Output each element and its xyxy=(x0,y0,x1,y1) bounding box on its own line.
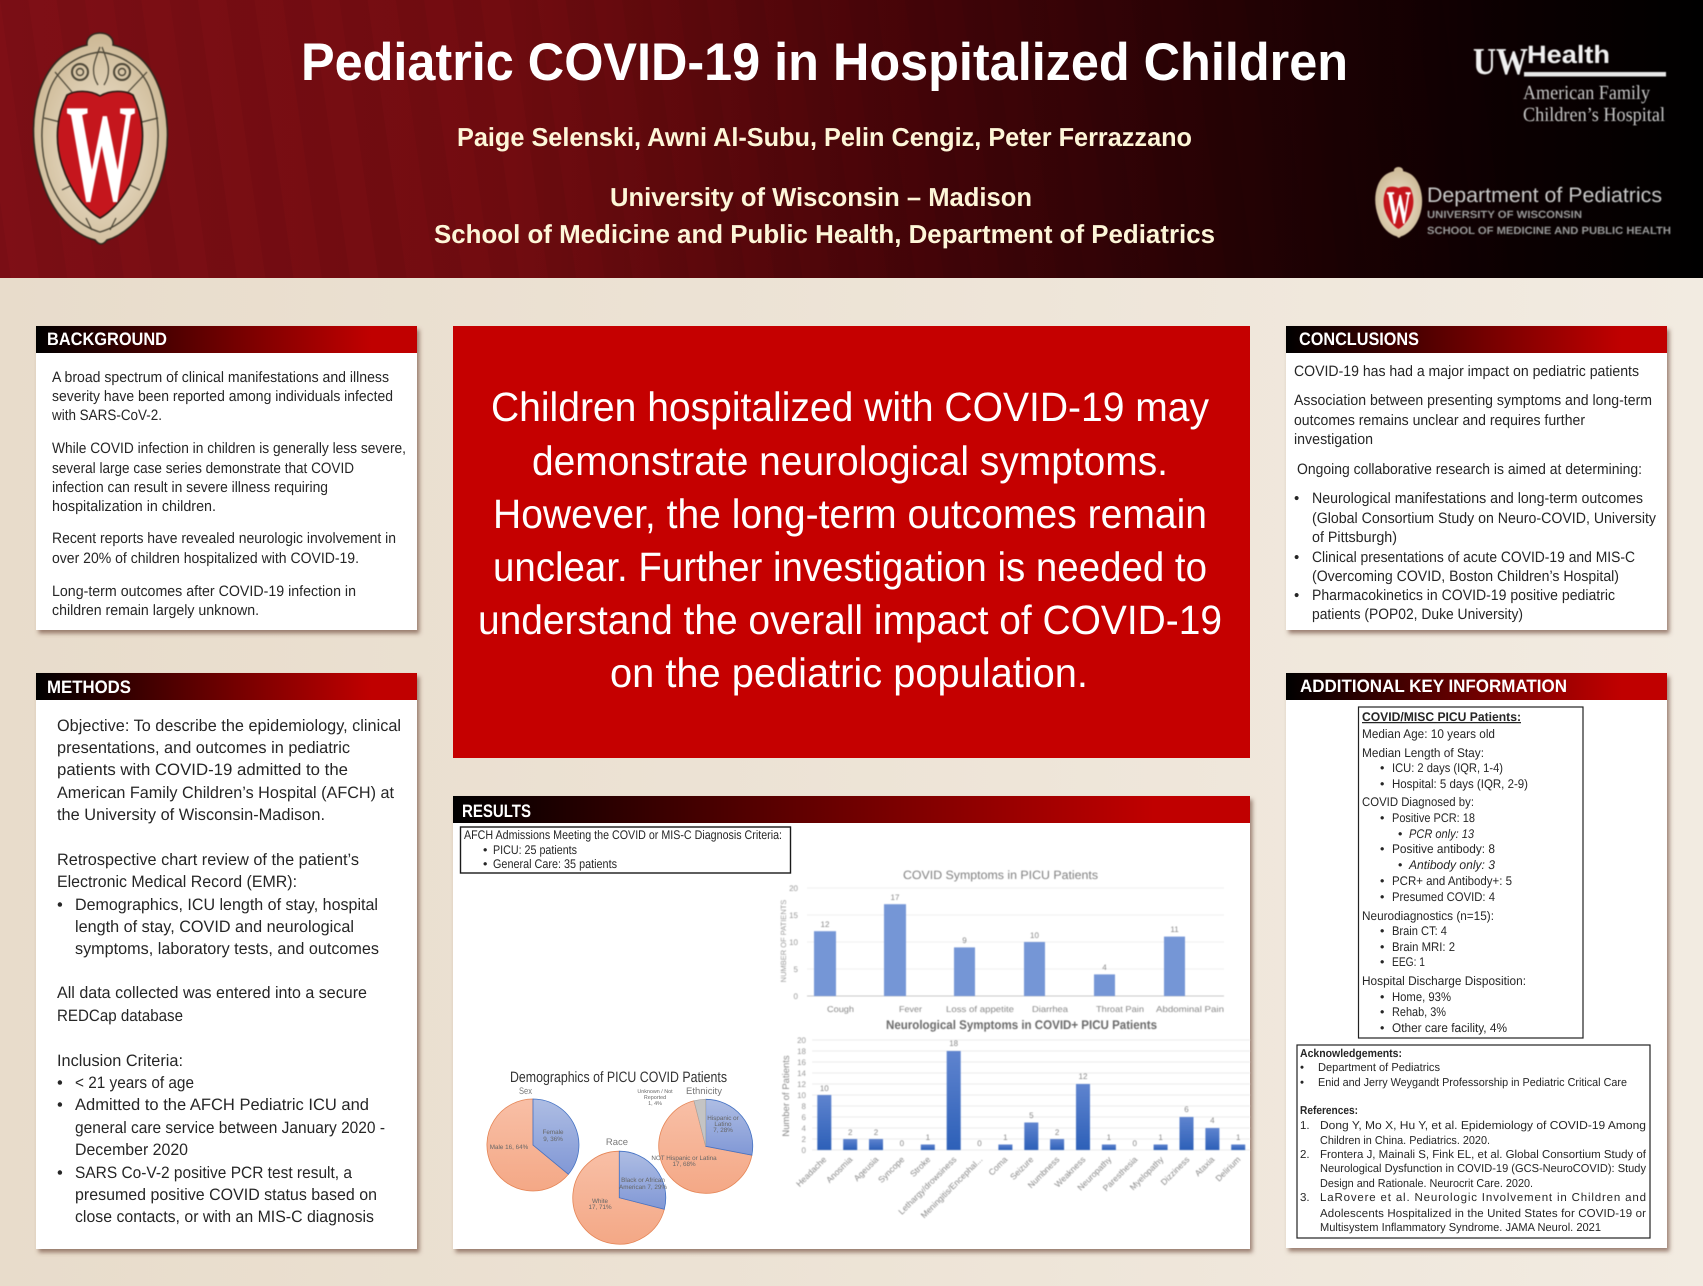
text block: inclusion criteria xyxy=(57,1052,385,1226)
bar chart: neurological symptoms: Headache xyxy=(794,1154,829,1189)
callout: acknowledgements and references: Frontera J, Mainali S, Fink EL, et al. Global Consortium Study of xyxy=(1320,1149,1647,1161)
pie chart: race: Race xyxy=(606,1137,628,1148)
callout: acknowledgements and references: Children in China. Pediatrics. 2020. xyxy=(1320,1135,1490,1147)
bar chart: neurological symptoms: Dizziness xyxy=(1159,1154,1191,1187)
pie chart: ethnicity: Unknown / Not xyxy=(637,1089,673,1095)
callout: patient statistics: Brain MRI: 2 xyxy=(1392,940,1455,954)
bar chart: COVID symptoms: 11 xyxy=(1170,925,1179,934)
bar chart: COVID symptoms: 20 xyxy=(789,884,799,893)
panel: key message: demonstrate neurological symptoms. xyxy=(532,438,1168,484)
callout: patient statistics: EEG: 1 xyxy=(1392,955,1425,969)
bar chart: neurological symptoms: Meningitis/Encephal... xyxy=(919,1154,984,1220)
bar chart: neurological symptoms: 1 xyxy=(1107,1133,1112,1142)
text block: inclusion criteria: December 2020 xyxy=(75,1141,188,1159)
pie chart: sex: Male 16, 64% xyxy=(490,1144,529,1151)
bar chart: COVID symptoms: Diarrhea xyxy=(1032,1004,1068,1014)
pie chart: ethnicity: Latino xyxy=(714,1121,732,1128)
bar chart: neurological symptoms: 6 xyxy=(1184,1105,1189,1114)
bar chart: COVID symptoms xyxy=(779,868,1224,1014)
text block: inclusion criteria: Admitted to the AFCH Pediatric ICU and xyxy=(75,1096,369,1114)
callout: patient statistics: • xyxy=(1398,858,1402,872)
bar chart: neurological symptoms: 1 xyxy=(1158,1133,1163,1142)
text block: objective: presentations, and outcomes in pediatric xyxy=(57,739,350,757)
callout: patient statistics: • xyxy=(1380,940,1384,954)
pie chart: ethnicity xyxy=(637,1086,753,1193)
bar chart: COVID symptoms: Throat Pain xyxy=(1096,1004,1144,1014)
callout: acknowledgements and references: Enid and Jerry Weygandt Professorship in Pediatric Critical Care xyxy=(1318,1077,1627,1089)
callout: patient statistics: PCR+ and Antibody+: 5 xyxy=(1392,874,1512,888)
bar chart: neurological symptoms: 14 xyxy=(797,1069,807,1078)
panel: methods xyxy=(36,673,417,1249)
text block: inclusion criteria: < 21 years of age xyxy=(75,1074,194,1092)
callout: patient statistics: • xyxy=(1380,811,1384,825)
bar chart: neurological symptoms: Ageusia xyxy=(852,1154,881,1183)
bar chart: COVID symptoms: Fever xyxy=(899,1004,922,1014)
bar chart: neurological symptoms: 4 xyxy=(802,1124,807,1133)
callout: patient statistics: • xyxy=(1380,955,1384,969)
callout: acknowledgements and references: Dong Y, Mo X, Hu Y, et al. Epidemiology of COVID-19 Among xyxy=(1320,1120,1646,1132)
text block: objective: American Family Children’s Hospital (AFCH) at xyxy=(57,784,394,802)
text block: objective: Objective: To describe the epidemiology, clinical xyxy=(57,717,401,735)
bar chart: COVID symptoms: 10 xyxy=(1030,931,1039,940)
callout: patient statistics: Neurodiagnostics (n=15): xyxy=(1362,909,1494,923)
bar chart: COVID symptoms: 0 xyxy=(794,992,799,1001)
text block: inclusion criteria: SARS Co-V-2 positive PCR test result, a xyxy=(75,1164,353,1182)
callout: acknowledgements and references xyxy=(1297,1045,1650,1238)
bar chart: neurological symptoms: Ataxia xyxy=(1193,1154,1217,1178)
pie chart: ethnicity: 1, 4% xyxy=(648,1101,662,1107)
pie chart: ethnicity: Hispanic or xyxy=(707,1115,739,1122)
text block: conclusions: Clinical presentations of acute COVID-19 and MIS-C xyxy=(1312,549,1635,566)
text block: objective xyxy=(57,717,401,824)
panel: additional key information xyxy=(1286,673,1667,1248)
panel: key message: Children hospitalized with COVID-19 may xyxy=(491,384,1209,430)
callout: patient statistics: Antibody only: 3 xyxy=(1408,858,1495,872)
panel: background xyxy=(36,326,417,630)
pie chart: ethnicity: NOT Hispanic or Latina xyxy=(651,1155,717,1162)
bar chart: neurological symptoms: 20 xyxy=(797,1036,807,1045)
logo: UW Health American Family Children's Hospital xyxy=(1473,41,1666,126)
bar chart: neurological symptoms: 2 xyxy=(1055,1128,1060,1137)
affiliation: University of Wisconsin – Madison xyxy=(610,182,1032,212)
bar chart: neurological symptoms: 2 xyxy=(874,1128,879,1137)
bar chart: neurological symptoms: 0 xyxy=(977,1139,982,1148)
callout: patient statistics: Positive antibody: 8 xyxy=(1392,842,1495,856)
text block: chart review: Demographics, ICU length of stay, hospital xyxy=(75,896,378,914)
heading: background: BACKGROUND xyxy=(47,329,167,349)
bar chart: neurological symptoms: 12 xyxy=(1079,1072,1088,1081)
callout: acknowledgements and references: • xyxy=(1300,1062,1304,1074)
text block: data collection xyxy=(57,984,367,1025)
callout: patient statistics: • xyxy=(1380,890,1384,904)
pie chart: sex: Sex xyxy=(519,1086,532,1097)
text block: chart review: Retrospective chart review of the patient’s xyxy=(57,851,359,869)
text block: background: A broad spectrum of clinical manifestations and illness xyxy=(52,369,389,386)
text block: inclusion criteria: presumed positive COVID status based on xyxy=(75,1186,377,1204)
logo: UW Health American Family Children's Hospital: Children’s Hospital xyxy=(1523,104,1665,126)
bar chart: neurological symptoms: 5 xyxy=(1029,1111,1034,1120)
logo: Department of Pediatrics: UNIVERSITY OF WISCONSIN xyxy=(1427,209,1582,221)
callout: acknowledgements and references: Neurological Dysfunction in COVID-19 (GCS-NeuroCOVID): Study xyxy=(1320,1163,1646,1175)
chart title: COVID symptoms: COVID Symptoms in PICU Patients xyxy=(903,868,1098,882)
text block: background: children remain largely unknown. xyxy=(52,602,259,619)
bar chart: neurological symptoms: 1 xyxy=(1003,1133,1008,1142)
bar chart: neurological symptoms: Weakness xyxy=(1052,1154,1087,1189)
callout: patient statistics: • xyxy=(1380,1021,1384,1035)
heading: conclusions: CONCLUSIONS xyxy=(1299,329,1419,349)
text block: conclusions: investigation xyxy=(1294,431,1373,448)
bar chart: neurological symptoms: 1 xyxy=(1236,1133,1241,1142)
text block: conclusions: outcomes remains unclear and requires further xyxy=(1294,412,1585,429)
bar chart: neurological symptoms: Seizure xyxy=(1008,1154,1036,1182)
callout: patient statistics: COVID Diagnosed by: xyxy=(1362,795,1474,809)
text block: conclusions: • xyxy=(1294,490,1299,507)
pie chart: ethnicity: Reported xyxy=(644,1095,666,1101)
callout: admissions: • xyxy=(483,843,487,857)
text block: chart review: • xyxy=(57,896,63,914)
text block: background xyxy=(51,369,406,619)
text block: conclusions: • xyxy=(1294,587,1299,604)
bar chart: neurological symptoms: Myelopathy xyxy=(1128,1154,1166,1192)
affiliation xyxy=(434,182,1215,249)
text block: background: severity have been reported among individuals infected xyxy=(52,388,393,405)
bar chart: COVID symptoms: 5 xyxy=(794,965,799,974)
bar chart: neurological symptoms: 4 xyxy=(1210,1116,1215,1125)
authors: Paige Selenski, Awni Al-Subu, Pelin Cengiz, Peter Ferrazzano xyxy=(457,122,1192,152)
callout: acknowledgements and references: 1. xyxy=(1300,1120,1310,1132)
text block: conclusions: COVID-19 has had a major impact on pediatric patients xyxy=(1294,363,1639,380)
panel: key message: on the pediatric population. xyxy=(610,650,1088,696)
bar chart: neurological symptoms: Numbness xyxy=(1026,1154,1061,1190)
bar chart: neurological symptoms: 6 xyxy=(802,1113,807,1122)
chart title: neurological symptoms: Neurological Symptoms in COVID+ PICU Patients xyxy=(886,1018,1157,1032)
callout: acknowledgements and references: References: xyxy=(1300,1105,1358,1117)
text block: conclusions: patients (POP02, Duke University) xyxy=(1312,606,1523,623)
callout: patient statistics: • xyxy=(1380,842,1384,856)
text block: background: Recent reports have revealed neurologic involvement in xyxy=(52,530,396,547)
pie chart: ethnicity: 7, 28% xyxy=(713,1127,733,1134)
bar chart: COVID symptoms: Abdominal Pain xyxy=(1156,1004,1224,1014)
text block: conclusions: (Overcoming COVID, Boston Children’s Hospital) xyxy=(1312,568,1619,585)
text block: background: several large case series demonstrate that COVID xyxy=(52,460,354,477)
text block: conclusions: Neurological manifestations and long-term outcomes xyxy=(1312,490,1643,507)
pie chart: ethnicity: Ethnicity xyxy=(686,1086,722,1097)
bar chart: neurological symptoms: Coma xyxy=(986,1154,1010,1177)
title: Pediatric COVID-19 in Hospitalized Children xyxy=(301,33,1348,92)
bar chart: neurological symptoms: Syncope xyxy=(876,1154,907,1185)
panel: key message: understand the overall impact of COVID-19 xyxy=(478,597,1222,643)
text block: conclusions: • xyxy=(1294,549,1299,566)
bar chart: COVID symptoms: 10 xyxy=(789,938,799,947)
pie chart: race: 17, 71% xyxy=(588,1204,612,1211)
bar chart: neurological symptoms: 8 xyxy=(802,1102,807,1111)
text block: data collection: REDCap database xyxy=(57,1007,183,1025)
callout: patient statistics xyxy=(1358,707,1583,1038)
panel: key message: However, the long-term outcomes remain xyxy=(493,491,1207,537)
pie chart: race xyxy=(573,1137,667,1244)
callout: patient statistics: Hospital Discharge Disposition: xyxy=(1362,974,1526,988)
callout: admissions: PICU: 25 patients xyxy=(493,843,577,857)
bar chart: COVID symptoms: 4 xyxy=(1102,963,1107,972)
text block: background: over 20% of children hospitalized with COVID-19. xyxy=(52,550,359,567)
heading: additional key information: ADDITIONAL KEY INFORMATION xyxy=(1300,676,1567,696)
text block: inclusion criteria: • xyxy=(57,1164,63,1182)
text block: background: Long-term outcomes after COVID-19 infection in xyxy=(52,583,356,600)
bar chart: neurological symptoms: Lethargy/drowsiness xyxy=(896,1154,958,1217)
callout: acknowledgements and references: Department of Pediatrics xyxy=(1318,1062,1440,1074)
callout: patient statistics: PCR only: 13 xyxy=(1409,827,1474,841)
pie chart: sex: 9, 36% xyxy=(543,1136,563,1143)
pie chart: ethnicity: 17, 68% xyxy=(672,1161,696,1168)
text block: conclusions xyxy=(1294,363,1656,623)
callout: patient statistics: • xyxy=(1380,1005,1384,1019)
bar chart: neurological symptoms: Paresthesia xyxy=(1101,1154,1140,1193)
text block: background: hospitalization in children. xyxy=(52,498,216,515)
callout: patient statistics: • xyxy=(1380,777,1384,791)
text block: conclusions: Association between presenting symptoms and long-term xyxy=(1294,392,1652,409)
bar chart: neurological symptoms: Anosmia xyxy=(824,1154,855,1185)
header banner xyxy=(0,0,1703,278)
logo: Department of Pediatrics xyxy=(1375,167,1671,238)
callout: patient statistics: • xyxy=(1380,874,1384,888)
text block: chart review xyxy=(57,851,379,958)
callout: patient statistics: Other care facility, 4% xyxy=(1392,1021,1507,1035)
callout: patient statistics: • xyxy=(1380,761,1384,775)
logo: UW Health American Family Children's Hospital: American Family xyxy=(1523,82,1650,104)
bar chart: neurological symptoms: 0 xyxy=(802,1146,807,1155)
bar chart: COVID symptoms: Loss of appetite xyxy=(946,1004,1014,1014)
callout: patient statistics: Home, 93% xyxy=(1392,990,1451,1004)
chart title: demographics: Demographics of PICU COVID Patients xyxy=(510,1069,727,1086)
text block: objective: the University of Wisconsin-Madison. xyxy=(57,806,325,824)
bar chart: neurological symptoms: 0 xyxy=(900,1139,905,1148)
text block: inclusion criteria: • xyxy=(57,1074,63,1092)
bar chart: COVID symptoms: 12 xyxy=(821,920,830,929)
bar chart: neurological symptoms: 0 xyxy=(1132,1139,1137,1148)
bar chart: neurological symptoms: 12 xyxy=(797,1080,807,1089)
bar chart: neurological symptoms: 2 xyxy=(848,1128,853,1137)
text block: background: with SARS-CoV-2. xyxy=(51,407,162,424)
callout: patient statistics: Brain CT: 4 xyxy=(1392,924,1447,938)
text block: chart review: length of stay, COVID and neurological xyxy=(75,918,354,936)
callout: acknowledgements and references: 2. xyxy=(1300,1149,1310,1161)
icon: university crest: W xyxy=(66,76,136,231)
callout: acknowledgements and references: LaRovere et al. Neurologic Involvement in Children and xyxy=(1320,1192,1646,1204)
bar chart: COVID symptoms: 15 xyxy=(789,911,799,920)
pie chart: sex: Female xyxy=(542,1129,564,1136)
callout: acknowledgements and references: Multisystem Inflammatory Syndrome. JAMA Neurol. 2021 xyxy=(1320,1222,1601,1234)
logo: Department of Pediatrics: Department of Pediatrics xyxy=(1427,184,1662,207)
affiliation: School of Medicine and Public Health, Department of Pediatrics xyxy=(434,219,1215,249)
bar chart: neurological symptoms: 18 xyxy=(797,1047,807,1056)
callout: patient statistics: Rehab, 3% xyxy=(1392,1005,1446,1019)
bar chart: neurological symptoms xyxy=(781,1018,1250,1220)
text block: objective: patients with COVID-19 admitted to the xyxy=(57,761,348,779)
bar chart: neurological symptoms: Delirium xyxy=(1213,1154,1242,1183)
callout: patient statistics: • xyxy=(1380,990,1384,1004)
text block: inclusion criteria: close contacts, or with an MIS-C diagnosis xyxy=(75,1208,374,1226)
text block: conclusions: (Global Consortium Study on Neuro-COVID, University xyxy=(1312,510,1656,527)
callout: acknowledgements and references: Design and Rationale. Neurocrit Care. 2020. xyxy=(1320,1178,1533,1190)
bar chart: neurological symptoms: 10 xyxy=(820,1084,829,1093)
bar chart: neurological symptoms: 1 xyxy=(926,1133,931,1142)
text block: inclusion criteria: general care service between January 2020 - xyxy=(75,1119,385,1137)
callout: acknowledgements and references: 3. xyxy=(1300,1192,1310,1204)
bar chart: neurological symptoms: Stroke xyxy=(908,1154,933,1179)
callout: admissions: General Care: 35 patients xyxy=(493,857,617,871)
pie charts: demographics xyxy=(487,1069,753,1244)
text block: conclusions: Pharmacokinetics in COVID-19 positive pediatric xyxy=(1312,587,1615,604)
callout: acknowledgements and references: Adolescents Hospitalized in the United States for COVID-19 or xyxy=(1320,1208,1646,1220)
bar chart: neurological symptoms: 2 xyxy=(802,1135,807,1144)
callout: patient statistics: Hospital: 5 days (IQR, 2-9) xyxy=(1392,777,1528,791)
bar chart: COVID symptoms: Cough xyxy=(827,1004,854,1014)
text block: background: While COVID infection in children is generally less severe, xyxy=(52,440,406,457)
icon: university crest xyxy=(33,33,168,244)
text block: background: infection can result in severe illness requiring xyxy=(52,479,328,496)
panel: results xyxy=(453,796,1250,1249)
callout: patient statistics: • xyxy=(1398,827,1402,841)
heading: methods: METHODS xyxy=(47,677,131,697)
callout: patient statistics: • xyxy=(1380,924,1384,938)
panel: conclusions xyxy=(1286,326,1667,630)
bar chart: neurological symptoms: Neuropathy xyxy=(1075,1154,1114,1192)
text block: inclusion criteria: • xyxy=(57,1096,63,1114)
text block: conclusions: Ongoing collaborative research is aimed at determining: xyxy=(1297,461,1642,478)
pie chart: race: Black or African xyxy=(621,1177,665,1184)
text block: conclusions: of Pittsburgh) xyxy=(1312,529,1397,546)
callout: patient statistics: Positive PCR: 18 xyxy=(1392,811,1475,825)
panel: key message: unclear. Further investigation is needed to xyxy=(493,544,1207,590)
logo: Department of Pediatrics: W xyxy=(1387,181,1411,233)
callout: patient statistics: Presumed COVID: 4 xyxy=(1392,890,1495,904)
logo: UW Health American Family Children's Hospital: Health xyxy=(1527,41,1610,69)
logo: Department of Pediatrics: SCHOOL OF MEDICINE AND PUBLIC HEALTH xyxy=(1427,225,1671,237)
bar chart: COVID symptoms: 9 xyxy=(962,936,967,945)
y axis label: Number of Patients xyxy=(781,1055,792,1137)
callout: admissions xyxy=(460,827,790,873)
callout: patient statistics: Median Age: 10 years old xyxy=(1362,727,1495,741)
y axis label: NUMBER OF PATIENTS xyxy=(779,900,788,982)
text block: data collection: All data collected was entered into a secure xyxy=(57,984,367,1002)
panel: key message xyxy=(453,326,1250,758)
text block: chart review: Electronic Medical Record (EMR): xyxy=(57,873,297,891)
pie chart: race: American 7, 29% xyxy=(619,1184,667,1191)
bar chart: COVID symptoms: 17 xyxy=(891,893,900,902)
logo: UW Health American Family Children's Hospital: UW xyxy=(1473,41,1528,83)
text block: chart review: symptoms, laboratory tests, and outcomes xyxy=(75,940,379,958)
callout: acknowledgements and references: Acknowledgements: xyxy=(1300,1048,1402,1060)
callout: admissions: • xyxy=(483,857,487,871)
pie chart: sex xyxy=(487,1086,579,1191)
bar chart: neurological symptoms: 10 xyxy=(797,1091,807,1100)
text block: inclusion criteria: Inclusion Criteria: xyxy=(57,1052,183,1070)
callout: patient statistics: ICU: 2 days (IQR, 1-4) xyxy=(1392,761,1503,775)
callout: patient statistics: COVID/MISC PICU Patients: xyxy=(1362,710,1521,724)
bar chart: neurological symptoms: 18 xyxy=(949,1039,959,1048)
callout: acknowledgements and references: • xyxy=(1300,1077,1304,1089)
callout: admissions: AFCH Admissions Meeting the COVID or MIS-C Diagnosis Criteria: xyxy=(464,828,782,842)
callout: patient statistics: Median Length of Stay: xyxy=(1362,746,1484,760)
heading: results: RESULTS xyxy=(462,801,531,821)
bar chart: neurological symptoms: 16 xyxy=(797,1058,807,1067)
pie chart: race: White xyxy=(592,1198,609,1205)
